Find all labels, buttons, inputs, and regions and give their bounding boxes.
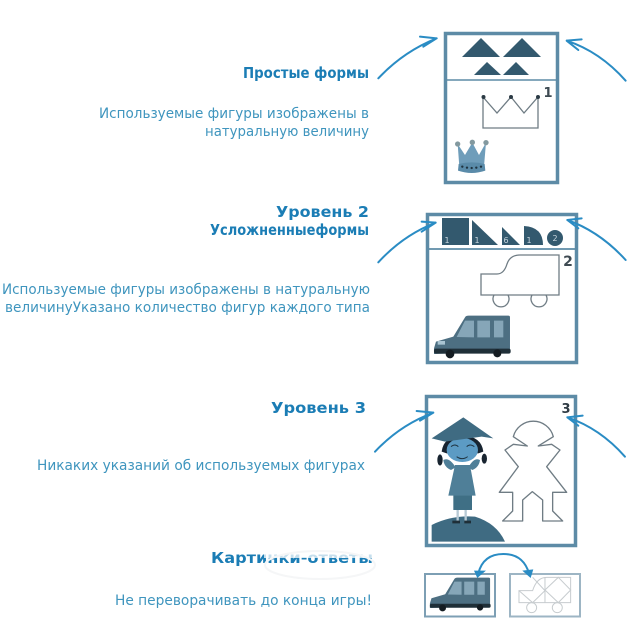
arrow: level 1 left [378, 37, 437, 78]
icons: shape pieces with counts: 1 [474, 236, 480, 245]
arrow: level 1 right [567, 39, 626, 81]
icons: triangle pieces [462, 38, 541, 75]
icons: shape pieces with counts: 2 [552, 234, 558, 243]
arrow: level 2 right [567, 218, 626, 260]
car outline with piece lines [519, 577, 571, 613]
description: level 1: натуральную величину [205, 124, 369, 140]
description: level 2: величинуУказано количество фигур каждого типа [5, 300, 370, 316]
crown outline [482, 95, 540, 128]
number 2: 2 [563, 254, 573, 270]
heading: answer cards: Картинки-ответы [211, 549, 373, 567]
level 2 text block [2, 203, 370, 316]
icons: shape pieces with counts [442, 218, 563, 246]
description: level 1: Используемые фигуры изображены в [99, 106, 369, 122]
icon: van [434, 316, 511, 358]
heading: level 2: Уровень 2 [276, 203, 369, 221]
icons: shape pieces with counts: 1 [444, 236, 450, 245]
icon: crown [455, 140, 489, 173]
icons: shape pieces with counts: 6 [503, 236, 509, 245]
number 1: 1 [543, 86, 553, 101]
car outline [481, 255, 559, 307]
description: level 2: Используемые фигуры изображены в натуральную [2, 282, 370, 298]
heading: level 3: Уровень 3 [271, 399, 366, 417]
panel: answer card outline [510, 574, 580, 616]
arrow: level 3 right [567, 416, 625, 457]
description: answer cards: Не переворачивать до конца игры! [115, 593, 372, 609]
description: level 3: Никаких указаний об используемых фигурах [37, 458, 365, 474]
description: level 2 [2, 282, 370, 316]
arrow: flip between answer cards [474, 554, 533, 578]
icon: small van [430, 578, 491, 611]
illustration: girl on a hill [432, 417, 505, 542]
faded watermark over heading [264, 551, 375, 579]
panel: level 2 card [427, 214, 577, 362]
icons: shape pieces with counts: 1 [526, 236, 532, 245]
number 3: 3 [561, 402, 571, 417]
panel: level 3 card [426, 396, 576, 546]
arrow: level 2 left [378, 222, 436, 262]
answer cards text block [115, 549, 375, 609]
level 3 text block [37, 399, 366, 474]
panel: answer card picture [425, 574, 495, 616]
subheading: complex shapes: Усложненныеформы [210, 221, 369, 239]
figure outline [499, 421, 567, 521]
heading: simple shapes: Простые формы [243, 64, 369, 82]
level 1 text block [99, 64, 369, 140]
panel: level 1 card [445, 34, 558, 182]
arrow: level 3 left [375, 411, 433, 452]
description: level 1 [99, 106, 369, 140]
